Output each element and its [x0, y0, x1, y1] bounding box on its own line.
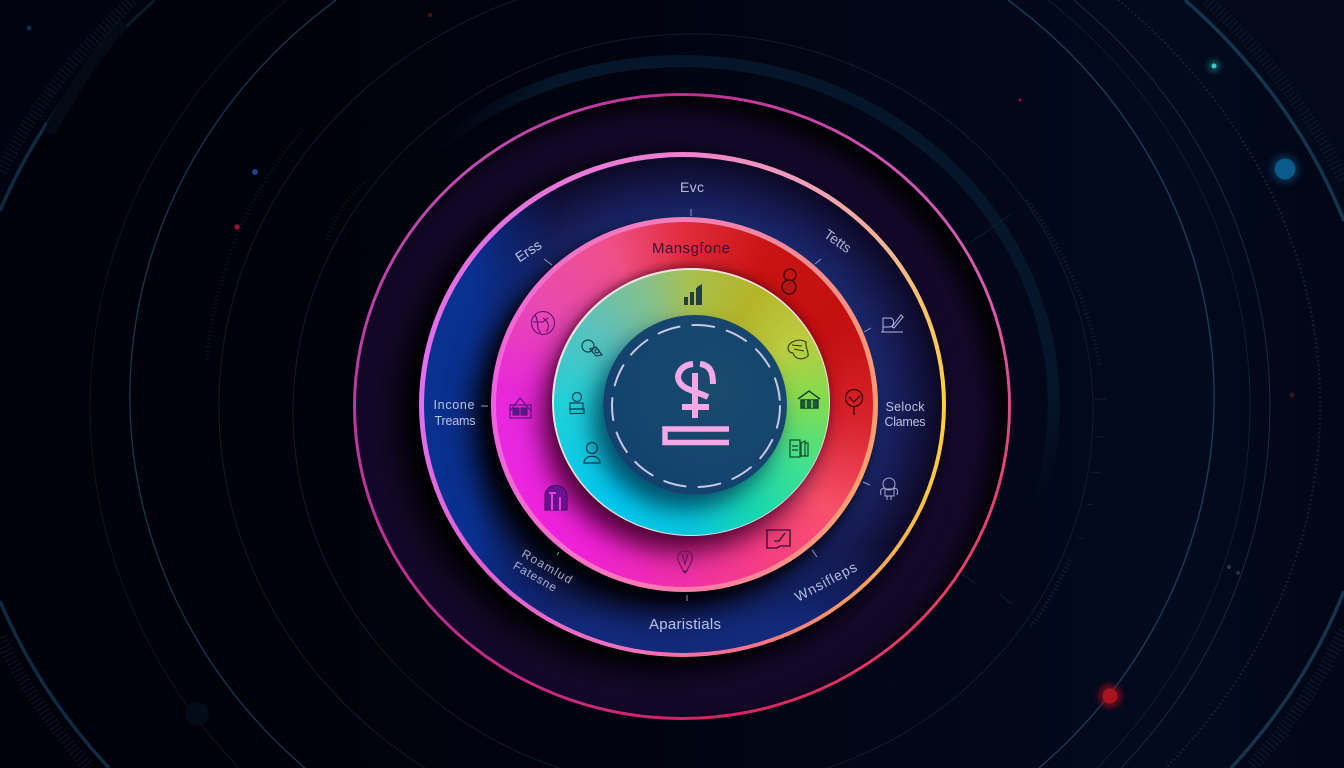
label: Evc: Evc [680, 179, 704, 195]
label: Erss: Erss [512, 236, 544, 265]
icon: magnifier keys [582, 340, 602, 356]
icon: house book [510, 398, 531, 418]
icon: documents [790, 440, 808, 457]
label: Incone Treams [434, 398, 476, 428]
label: Wnsifleps: Wnsifleps [792, 559, 859, 605]
icon: person stamp [570, 392, 584, 414]
icon: dome scene [545, 486, 567, 510]
label: Roamlud Fatesne: Roamlud [519, 546, 575, 587]
label: Mansgfone: Mansgfone [652, 240, 730, 257]
connector ticks [481, 209, 871, 601]
ring: red-magenta band [491, 217, 878, 592]
center disc [603, 315, 787, 495]
icon: hand [788, 340, 808, 359]
icon: screen [767, 530, 790, 548]
ring: green-cyan band [552, 268, 830, 536]
outer thin gradient ring [353, 93, 1011, 720]
label: Aparistials: Aparistials [649, 616, 721, 633]
icon: person [584, 442, 600, 463]
label: Tetts: Tetts [821, 226, 855, 256]
icon: house [798, 391, 820, 408]
icon: pin [846, 390, 862, 415]
center dashed ring [612, 325, 780, 487]
icon: globe face [532, 312, 554, 334]
icon: pen [881, 315, 903, 332]
label: Selock Clames [884, 400, 926, 429]
icon: bar chart [684, 284, 702, 305]
icon: robot [881, 478, 898, 500]
icon: figure eight people [782, 269, 796, 294]
ring: outer labels band [419, 152, 946, 657]
label: Incone Treams: Treams [434, 414, 476, 428]
icon: central dollar symbol [665, 364, 729, 442]
label: Roamlud Fatesne: Fatesne [511, 558, 560, 595]
label: Incone Treams: Incone [434, 398, 475, 412]
label: Selock Clames: Clames [884, 415, 926, 429]
label: Selock Clames: Selock [886, 400, 925, 414]
icon: balloon bulb [678, 551, 692, 573]
